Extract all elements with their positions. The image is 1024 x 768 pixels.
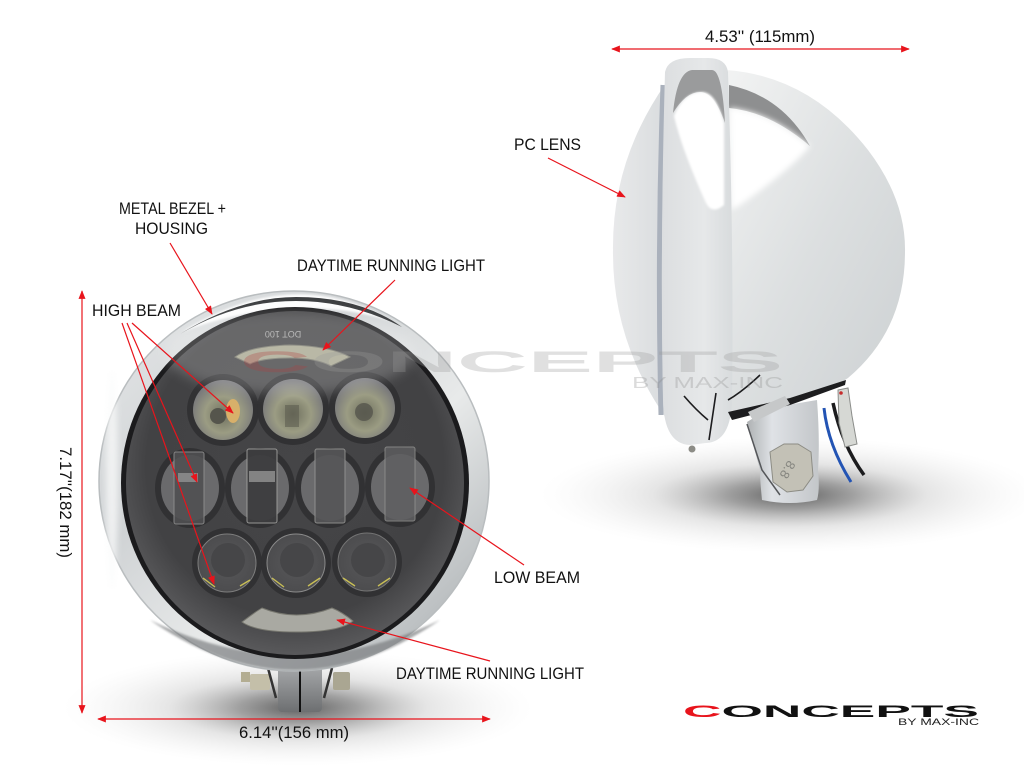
label: side width: 4.53'' (115mm) bbox=[705, 27, 815, 46]
label: front width: 6.14''(156 mm) bbox=[239, 723, 349, 742]
brand logo bbox=[683, 702, 980, 727]
connector tip bbox=[839, 391, 843, 395]
arrow: top DRL bbox=[323, 280, 395, 350]
floor shadow: front headlight bbox=[63, 650, 533, 766]
high beam top lenses bbox=[193, 378, 395, 440]
arrow: side width bbox=[612, 48, 909, 50]
brand logo: BY MAX-INC bbox=[898, 717, 980, 727]
bottom lenses bbox=[198, 533, 396, 592]
wiring clutter bbox=[684, 375, 760, 440]
red annotation arrows bbox=[82, 49, 909, 719]
bracket edge bbox=[747, 424, 780, 495]
housing top reflection bbox=[729, 85, 810, 146]
arrow: height bbox=[81, 291, 83, 713]
lens dome bbox=[613, 83, 666, 418]
label: metal bezel and housing bbox=[119, 199, 226, 238]
bolt bbox=[770, 444, 813, 492]
lens housings bbox=[155, 372, 435, 598]
label: top daytime running light: DAYTIME RUNNING LIGHT bbox=[297, 256, 485, 275]
arrow: metal bezel bbox=[170, 243, 212, 314]
mounting bracket bbox=[241, 660, 350, 712]
brand logo: C ONCEPTS bbox=[683, 702, 979, 721]
top DRL strip bbox=[235, 345, 350, 366]
top glare veil bbox=[165, 310, 415, 394]
bezel top highlight bbox=[182, 294, 394, 332]
arrow: high beam middle lens bbox=[127, 323, 197, 482]
housing clamp bbox=[748, 396, 790, 422]
label: metal bezel and housing: METAL BEZEL + bbox=[119, 199, 226, 218]
housing glare bbox=[730, 108, 810, 210]
bezel dark reflection bbox=[180, 297, 402, 334]
lens face bbox=[126, 311, 464, 655]
chrome bezel bbox=[99, 291, 489, 671]
bezel left highlight bbox=[106, 370, 118, 590]
ring window bbox=[673, 70, 725, 123]
label: PC lens: PC LENS bbox=[514, 135, 581, 154]
label: metal bezel and housing: HOUSING bbox=[135, 219, 208, 238]
arrow: bottom DRL bbox=[337, 620, 490, 661]
housing dome bbox=[726, 70, 905, 417]
front headlight bbox=[99, 291, 489, 712]
DOT marking: DOT 100 bbox=[265, 329, 301, 339]
low beam middle lenses bbox=[161, 447, 429, 524]
arrow: PC lens bbox=[548, 158, 625, 197]
lens edge strip bbox=[659, 85, 663, 415]
arrow: high beam bottom lens bbox=[122, 323, 214, 584]
bottom DRL strip bbox=[242, 608, 353, 632]
floor shadow: side headlight bbox=[540, 437, 1024, 553]
arrow: low beam bbox=[410, 488, 524, 565]
arrow: high beam top lens bbox=[132, 323, 233, 413]
bolt: 8.8 bbox=[777, 458, 799, 481]
base screw bbox=[688, 446, 696, 452]
watermark bbox=[240, 346, 783, 392]
side headlight bbox=[613, 58, 905, 503]
bezel bottom shading bbox=[150, 620, 440, 670]
arrow: front width bbox=[98, 718, 490, 720]
wiring band bbox=[728, 380, 846, 420]
chrome ring bbox=[662, 58, 732, 445]
connector bbox=[838, 388, 857, 447]
watermark: BY MAX-INC bbox=[632, 375, 783, 392]
label: bottom daytime running light: DAYTIME RUNNING LIGHT bbox=[396, 664, 584, 683]
label: low beam: LOW BEAM bbox=[494, 568, 580, 587]
wires bbox=[824, 403, 864, 482]
dark lens rim bbox=[121, 307, 469, 659]
ring glare bbox=[674, 92, 724, 210]
watermark: C ONCEPTS bbox=[240, 346, 783, 379]
label: high beam: HIGH BEAM bbox=[92, 301, 181, 320]
mount bracket bbox=[747, 400, 819, 503]
label: height: 7.17''(182 mm) bbox=[56, 447, 75, 558]
